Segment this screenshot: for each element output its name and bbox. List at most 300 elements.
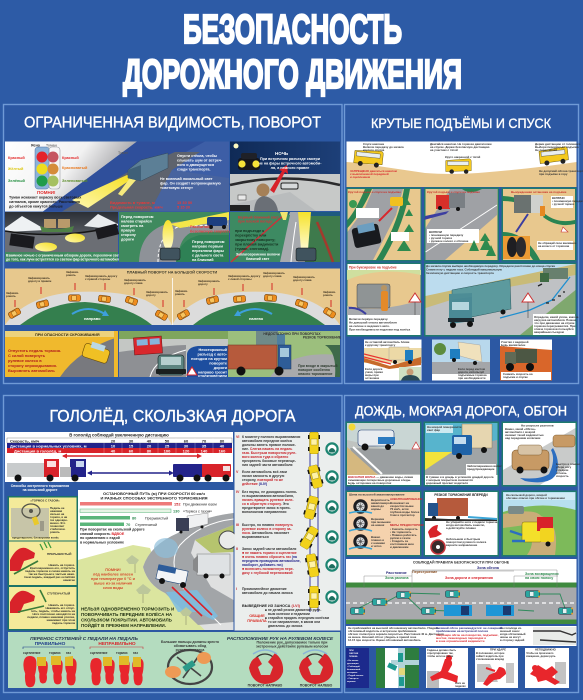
bottom strip: pedals and steering wheel: обхватывать обод bbox=[174, 644, 207, 648]
table: stopping distance with trucks: 80 bbox=[220, 438, 225, 443]
left column: braking methods bbox=[8, 496, 78, 630]
scene: truck in rain with beam: В тумане и в дождь в условиях дождей дорога bbox=[426, 475, 494, 479]
strip: overtaking warnings: мостах, пешеходных переходах и bbox=[436, 636, 486, 640]
note: navy rules box: дистанции bbox=[347, 663, 359, 665]
scene: turn with headlights: с дальнего света bbox=[192, 254, 224, 258]
table: stopping distance with trucks: 30 bbox=[129, 438, 134, 443]
strip: smooth turn at high speed: Зафиксировать bbox=[124, 278, 146, 282]
diagram: overtaking rules: Зона возвращения bbox=[525, 572, 559, 576]
scene: fog and truck: «световую стену» bbox=[160, 186, 193, 190]
right column: skid recovery steps: III bbox=[236, 523, 239, 527]
panel: steep climbs and descent bbox=[344, 104, 583, 384]
right column: skid recovery steps: Без паузы, не дожидаясь полно- bbox=[242, 490, 297, 494]
right column: skid recovery steps: го выравнивания автомобиля, bbox=[242, 494, 294, 498]
scene: night driving bbox=[230, 142, 340, 211]
scene: turn with headlights: безопасную скорость bbox=[190, 230, 232, 234]
scene: careless passing: столкновением bbox=[198, 374, 227, 378]
scene: hill profile with buses: Выбери передачу до подъёма bbox=[535, 145, 579, 149]
small scene: truck on hill: к другому транспорту bbox=[365, 343, 396, 347]
card: posture before impact: педалях bbox=[455, 685, 466, 688]
strip: smooth turn at high speed: с правой стороны bbox=[85, 277, 111, 281]
card: impact figure: НЕПОДВИЖНО bbox=[535, 648, 557, 652]
note: navy rules box: • Не менее bbox=[347, 660, 359, 662]
left column: braking methods: тормоз, и на bbox=[50, 515, 68, 519]
diagram: overtaking rules: Зона разгона bbox=[385, 576, 409, 580]
card: collision posture: ПРИ УДАРЕ bbox=[490, 648, 506, 652]
frame row: meeting on slope bbox=[346, 188, 422, 262]
left column: braking methods: ровать bbox=[50, 530, 60, 534]
scene: fog and truck: фар. Он создаёт непроницаемую bbox=[160, 182, 221, 186]
scene: tanker and truck skid: обочине опасно при обгоне и торможении bbox=[506, 496, 565, 500]
strip: smooth turn at high speed: Зафикси- bbox=[66, 270, 79, 274]
panel: aquaplaning tires: Вершина bbox=[371, 517, 384, 521]
scene: skid danger: С силой повернуть bbox=[8, 353, 46, 358]
small scene: truck on slope: Если перед местом bbox=[458, 367, 485, 371]
left column: braking methods: так же быстрым и частым нажи- bbox=[28, 572, 75, 576]
scene: low beam rule: ближний свет bbox=[246, 257, 270, 261]
strip: smooth turn at high speed: Зафикси- bbox=[6, 291, 19, 295]
center: stopping distance chart and road: НЕЛЬЗЯ ОДНОВРЕМЕННО ТОРМОЗИТЬ И bbox=[81, 606, 174, 612]
right column: skid recovery steps: Если автомобиль всё-таки bbox=[242, 470, 287, 474]
card: impact figure: смещение, держи руль bbox=[526, 655, 556, 658]
scene: low beam rule: Верный ближний свет bbox=[238, 216, 279, 220]
scene: car with water spray: снижает твоей видимостью bbox=[505, 433, 544, 437]
strip: smooth turn at high speed: Зафиксировать bbox=[28, 276, 50, 280]
frame row: stop on descent: • ручной тормоз bbox=[429, 236, 453, 240]
table: stopping distance with trucks: Дистанция в нормальных условиях, м bbox=[10, 443, 87, 448]
scene: car with water spray: На скорости разгонов bbox=[521, 424, 554, 428]
center: stopping distance chart and road: При поворотах на скользкой дороге bbox=[80, 528, 145, 532]
card: collision posture bbox=[475, 648, 518, 688]
panel: truck with sudden brake: а действуйте плавно bbox=[446, 526, 476, 530]
bottom strip: pedals and steering wheel: экстренных действиях рулевым колесом bbox=[256, 644, 328, 648]
panel: aquaplaning tires: нормы bbox=[371, 507, 381, 511]
panel: aquaplaning tires: 3 мм и протектор bbox=[390, 513, 415, 517]
card: posture before impact: Сиденье должно быть bbox=[427, 648, 456, 652]
scene: low beam rule: закрытому повороту; bbox=[235, 238, 275, 242]
strip: overtaking warnings: Запрещён обгон на поворотах, подъёмах, bbox=[436, 633, 499, 637]
left column: braking methods: позволяет bbox=[50, 524, 65, 528]
table: stopping distance with trucks bbox=[5, 432, 233, 482]
bottom strip: pedals and steering wheel: тормоз bbox=[116, 651, 128, 655]
right column: skid recovery steps: Занос задней части автомобиля bbox=[242, 547, 296, 551]
scene: careless passing: дороги bbox=[214, 366, 228, 370]
scene: car with water spray: Быстро и плавно bbox=[556, 462, 580, 466]
main title bbox=[123, 6, 462, 97]
bottom strip: pedals and steering wheel: Положение рук, допускаемое только при bbox=[257, 640, 327, 644]
bottom strip: pedals and steering wheel: сцепление bbox=[90, 651, 108, 655]
small scene: truck on slope bbox=[432, 340, 490, 380]
right column: skid recovery steps: то же направление, в каком они bbox=[268, 620, 320, 624]
strip: overtaking warnings: когда обгоняемый bbox=[500, 632, 526, 636]
strip: overtaking warnings: приближение на встречной полосе bbox=[436, 629, 489, 633]
center: stopping distance chart and road: 130 bbox=[173, 508, 180, 514]
strip: smooth turn at high speed: Зафикси- bbox=[323, 290, 336, 294]
small scene: off-road truck: Участки с ведёрной bbox=[501, 340, 529, 344]
strip: smooth turn at high speed: дорогу слева bbox=[263, 274, 282, 278]
strip: overtaking warnings bbox=[346, 626, 576, 646]
bottom strip: pedals and steering wheel: ПОВОРОТ НАПРАВО bbox=[248, 684, 283, 688]
panel: aquaplaning tires: на шинах bbox=[371, 523, 385, 527]
frame row: stop on descent bbox=[424, 188, 499, 262]
scene: large truck on descent: До начала спуска выбери необходимую передачу. Определи расстояние до конца спуска bbox=[426, 264, 555, 268]
note: navy rules box: зеркала bbox=[347, 681, 356, 683]
scene: car with water spray: с педали bbox=[556, 468, 569, 472]
scene: mountain road at night: Взаимное ночью с ограниченным обзором дороги, переключи свет фар на ближний bbox=[6, 254, 149, 258]
scene: turn with headlights: правую bbox=[121, 228, 135, 232]
diagram: junction bbox=[376, 648, 419, 688]
scene: turn with headlights bbox=[119, 212, 232, 262]
frame row: forced stop: Вынужденная остановка на подъёме bbox=[511, 190, 567, 194]
strip: overtaking warnings: Начинай обгон рекомендуется: не совершай bbox=[436, 626, 503, 630]
center: stopping distance chart and road: 70 bbox=[126, 522, 130, 527]
bottom strip: pedals and steering wheel: рулевого колеса bbox=[176, 648, 204, 652]
label: emergency braking methods: на скользкой дороге bbox=[23, 488, 57, 492]
small scene: truck on slope: подъёмные тормоза bbox=[458, 373, 487, 377]
left column: braking methods: Нажать на тормоз. bbox=[49, 563, 75, 567]
scene: careless passing: поездом на крутом bbox=[191, 357, 227, 361]
small scene: truck on hill: Не оставляй автомобиль ближе bbox=[365, 340, 410, 344]
strip: overtaking warnings: На гололёде из- bbox=[500, 626, 522, 630]
scene: hill profile with buses: и сцеплением bbox=[350, 175, 370, 179]
table: stopping distance with trucks: 40 bbox=[220, 443, 225, 448]
diagram: overtaking rules bbox=[346, 559, 576, 624]
strip: smooth turn at high speed: ровать bbox=[323, 293, 333, 297]
note: navy rules box: ПРИ bbox=[349, 650, 354, 652]
right column: skid recovery steps: действие (II-IV) bbox=[242, 482, 267, 486]
center: stopping distance chart and road: При движении юзом bbox=[183, 502, 217, 506]
left column: braking methods: сильно на bbox=[50, 512, 65, 516]
panel: aquaplaning tires: глубина воды более bbox=[390, 510, 420, 514]
note: navy rules box bbox=[346, 648, 369, 688]
right column: skid recovery steps: сторону, повторяй то же bbox=[242, 478, 283, 482]
scene: turn with headlights: на ближний bbox=[192, 258, 214, 262]
strip: smooth turn at high speed: направо bbox=[84, 316, 101, 321]
scene: hill profile with buses: Круто накренной с тягой bbox=[445, 155, 481, 159]
scene: fog and truck: Туман bbox=[46, 144, 57, 148]
right column: skid recovery steps bbox=[234, 432, 340, 630]
scene: fog and truck: Видимость в тумане, м bbox=[110, 200, 155, 205]
scene: turn with headlights: переключи фары bbox=[192, 249, 224, 253]
card: collision posture: столкновении вперёд bbox=[476, 657, 504, 661]
scene: fog and truck: Туман искажает окраску всех световых bbox=[9, 196, 82, 200]
right column: skid recovery steps: носа. Автомобиль начинает bbox=[242, 531, 289, 535]
table: stopping distance with trucks: 10 bbox=[111, 443, 116, 448]
scene: turn with headlights: налево старайся bbox=[121, 220, 152, 224]
diagram: overtaking rules: на свою полосу bbox=[525, 576, 553, 580]
scene: night driving: НОЧЬ bbox=[275, 151, 289, 156]
scene: fog and truck: Зеленоватый bbox=[62, 179, 88, 183]
table: stopping distance with trucks: 30 bbox=[184, 443, 189, 448]
left column: braking methods: Педаль не bbox=[50, 506, 65, 510]
center: stopping distance chart and road: И РАЗНЫХ СПОСОБАХ ЭКСТРЕННОГО ТОРМОЖЕНИЯ bbox=[101, 496, 208, 500]
scene: large truck on descent: безопасную дистанцию и скорость транспорта bbox=[426, 271, 494, 275]
diagram: overtaking rules: Зона дороги и опережения bbox=[445, 576, 493, 580]
center: stopping distance chart and road: Ступенчатый bbox=[135, 523, 157, 527]
left column: braking methods: Ноги постоянно находятся на bbox=[32, 612, 75, 616]
small scene: truck on hill: Если дорога bbox=[365, 367, 383, 371]
note: navy rules box: ПОМНИ: bbox=[349, 656, 358, 658]
bottom strip: pedals and steering wheel: ПЕРЕНОС СТУПЕНЕЙ С ПЕДАЛИ НА ПЕДАЛЬ bbox=[30, 634, 138, 642]
scene: large truck on descent: тормоза перегреваются. При bbox=[534, 324, 576, 328]
heading: rain: ДОЖДЬ, МОКРАЯ ДОРОГА, ОБГОН bbox=[355, 404, 567, 418]
scene: mountain road at night: до того, как лучи встретятся со светом фар встречного автомобиля bbox=[6, 258, 121, 262]
panel: truck with sudden brake: РЕЗКОЕ ТОРМОЖЕНИЕ ВПЕРЕДИ bbox=[434, 493, 488, 497]
frame row: forced stop: на колесо от тормозов bbox=[538, 244, 570, 248]
left column: braking methods: Нажимать его отпус- bbox=[45, 606, 75, 610]
scene: big truck on curve: НЕДОСТАТОЧНО ПРИ ПОВОРОТАХ bbox=[263, 332, 321, 336]
scene: turn with headlights: Перед поворотом bbox=[192, 240, 225, 244]
card: posture before impact bbox=[426, 648, 468, 688]
panel: aquaplaning tires: АКВАПЛАНИРОВАНИЕ bbox=[390, 497, 423, 501]
right column: skid recovery steps: газа. Быстрым поворотом руле- bbox=[242, 451, 296, 455]
frame row: forced stop: • ручной тормоз bbox=[552, 202, 575, 206]
scene: skid danger: рулевое колесо в bbox=[8, 358, 42, 363]
left column: braking methods: Кратковременно его, отпустить bbox=[30, 566, 75, 570]
scene: truck in rain with beam: свет фар bbox=[427, 428, 440, 432]
frame row: towing on climb: Включи первую передачу. bbox=[349, 317, 388, 321]
table: stopping distance with trucks: 80 bbox=[147, 448, 152, 453]
scene: turn with headlights: смотреть на bbox=[121, 224, 144, 228]
scene: careless passing: направо грозит bbox=[198, 370, 227, 374]
bottom strip: pedals and steering wheel bbox=[8, 632, 340, 688]
heading: limited visibility: ОГРАНИЧЕННАЯ ВИДИМОСТЬ, ПОВОРОТ bbox=[24, 114, 321, 132]
bottom strip: pedals and steering wheel: РАСПОЛОЖЕНИЕ РУК НА РУЛЕВОМ КОЛЕСЕ bbox=[227, 636, 334, 642]
scene: big truck on curve: опасно торможение bbox=[298, 372, 333, 376]
right column: skid recovery steps: Быстро, но плавно повернуть bbox=[242, 523, 293, 527]
scene: car with water spray: и снизь bbox=[556, 471, 567, 475]
table: stopping distance with trucks: 60 bbox=[184, 438, 189, 443]
scene: car with water spray: автомобиля с мокрой bbox=[505, 430, 536, 434]
scene: fog and truck: Не включай локальный свет bbox=[160, 177, 213, 181]
small scene: truck on hill bbox=[364, 340, 422, 380]
note: navy rules box: • Смотри в bbox=[347, 678, 359, 680]
scene: large truck on descent: Сними ногу с педали газа. Соблюдай максимальную bbox=[426, 268, 503, 272]
bottom strip: pedals and steering wheel: ПОВОРОТ НАЛЕВО bbox=[300, 684, 333, 688]
small scene: truck on hill: узкая, прими bbox=[365, 370, 383, 374]
scene: low beam rule: перекрёстку или bbox=[235, 234, 267, 238]
scene: hill profile with buses: Спуск наклона bbox=[363, 142, 384, 146]
scene: skid danger: Отпустить педаль тормоза. bbox=[8, 348, 61, 353]
right column: skid recovery steps: ВЫВЕДЕНИЕ ИЗ ЗАНОСА (I-VI) bbox=[242, 604, 301, 608]
panel: aquaplaning tires: 70 км/ч, если bbox=[390, 507, 409, 511]
scene: hill profile with buses: Держи дистанцию от головного bbox=[535, 142, 581, 146]
strip: smooth turn at high speed: дорогу слева bbox=[124, 281, 143, 285]
left column: braking methods: СТУПЕНЧАТЫЙ bbox=[47, 592, 70, 596]
panel: aquaplaning tires: и давлением bbox=[390, 545, 408, 549]
left column: braking methods: педали, плавно нажимая усилие, bbox=[27, 615, 75, 619]
table: stopping distance with trucks: 160 bbox=[219, 448, 226, 453]
right column: skid recovery steps: начать вращать рулевое коле- bbox=[242, 498, 293, 502]
strip: overtaking warnings: не менее. Начинай обгон: убедись в правой зоне bbox=[348, 635, 417, 639]
right column: skid recovery steps: ния задней части автомобиля bbox=[242, 463, 293, 467]
note: navy rules box: • Подай сигнал bbox=[347, 674, 364, 677]
strip: smooth turn at high speed: Зафикси- bbox=[175, 289, 188, 293]
scene: hill profile with buses: Не переключай bbox=[535, 148, 557, 152]
center: stopping distance chart and road: слоя воды bbox=[103, 586, 123, 590]
frame row: forced stop: Не обращай свое внимание bbox=[538, 241, 577, 245]
bottom strip: pedals and steering wheel: газ bbox=[133, 651, 138, 655]
scene: fog and truck: Жёлтый bbox=[7, 167, 24, 171]
scene: wet road jeep bbox=[346, 422, 422, 486]
right column: skid recovery steps: ■ не делай резких движений руле- bbox=[265, 608, 321, 612]
table: stopping distance with trucks: 70 bbox=[202, 438, 207, 443]
strip: overtaking warnings: обгона: посмотри в зеркала скоростью. Расстояния 40 м. Дистанция bbox=[348, 632, 444, 636]
scene: turn with headlights: Перед поворотом bbox=[121, 215, 154, 219]
panel: aquaplaning tires: Вероятность bbox=[371, 498, 390, 502]
scene: fog and truck: 15 30 50 bbox=[177, 200, 192, 205]
panel: aquaplaning tires: Шина на высокой аквапланирование bbox=[349, 492, 405, 496]
right column: skid recovery steps: автомобиля передние колёса bbox=[242, 439, 292, 443]
scene: fog and truck: Красноватый bbox=[62, 166, 88, 170]
scene: mountain road at night bbox=[5, 212, 149, 262]
card: posture before impact: отрегулировано так, bbox=[427, 652, 454, 655]
table: stopping distance with trucks: 40 bbox=[147, 438, 152, 443]
center: stopping distance chart and road: ОСТАНОВОЧНЫЙ ПУТЬ (м) ПРИ СКОРОСТИ 60 км/ч bbox=[103, 491, 206, 496]
scene: hill profile with buses bbox=[346, 142, 583, 187]
scene: hill profile with buses: ЗАПРЕЩЕНО двигаться накатом bbox=[350, 169, 397, 173]
small scene: off-road truck bbox=[500, 340, 552, 380]
frame row: forced stop bbox=[502, 188, 583, 262]
scene: big truck on curve bbox=[228, 331, 342, 377]
scene: large truck on descent: Определи, какой уклон, какова bbox=[534, 315, 579, 319]
diagram: overtaking rules: Перестроение bbox=[412, 570, 437, 574]
panel: truck with sudden brake: верните направление bbox=[446, 543, 478, 547]
right column: skid recovery steps: ОБЩИЕ bbox=[249, 613, 265, 618]
right column: skid recovery steps: начал заносить в другую bbox=[242, 474, 284, 478]
table: stopping distance with trucks: 50 bbox=[165, 438, 170, 443]
scene: truck in rain with beam: с мокрым покрытием снижается bbox=[426, 478, 473, 482]
left column: braking methods: тить, педаль, чтобы нажать на bbox=[31, 609, 75, 613]
panel: aquaplaning tires: • Следить за bbox=[390, 539, 408, 543]
scene: truck in rain with beam: Заблаговременно включи bbox=[467, 464, 505, 468]
table: stopping distance with trucks: Дистанция в гололёд, м bbox=[14, 448, 61, 453]
scene: car with water spray: Важно, какой «Обгон» bbox=[505, 427, 536, 431]
table: stopping distance with trucks: 20 bbox=[147, 443, 152, 448]
strip: overtaking warnings: шины не могут bbox=[500, 635, 521, 639]
scene: low beam rule: Заблаговременно включи bbox=[236, 252, 280, 256]
panel: truck with sudden brake: Небольшим и быстрым bbox=[446, 537, 480, 541]
panel: ice, slippery road bbox=[4, 396, 342, 692]
strip: overtaking warnings: 12-15 при скорости. Оцени обгоняемый автомобиль bbox=[348, 638, 421, 642]
panel: aquaplaning tires: • Снизить скорость bbox=[390, 527, 418, 531]
table: stopping distance with trucks: 20 bbox=[111, 438, 116, 443]
scene: skid danger: ПРИ ОПАСНОСТИ СКРОЖИВАНИЯ bbox=[35, 333, 100, 337]
center: stopping distance chart and road: по сравнению с ездой bbox=[80, 536, 120, 540]
frame row: towing on climb bbox=[346, 262, 422, 336]
bottom strip: pedals and steering wheel: сцепление bbox=[23, 651, 41, 655]
scene: tanker and truck skid: На скользкой дороге, мокрой bbox=[506, 493, 547, 497]
right column: skid recovery steps: ■ включить пониженную пере- bbox=[242, 567, 294, 571]
right column: skid recovery steps: рулевое колесо в сторону за- bbox=[242, 527, 292, 531]
right column: skid recovery steps: VI bbox=[236, 435, 239, 439]
small scene: truck on hill: остановке bbox=[365, 376, 380, 380]
strip: smooth turn at high speed: ровать bbox=[66, 273, 76, 277]
scene: fog and truck: Ясно bbox=[31, 144, 41, 148]
scene: fog and truck: Туман bbox=[118, 151, 128, 155]
table: stopping distance with trucks: 15 bbox=[129, 443, 134, 448]
main title: БЕЗОПАСНОСТЬ bbox=[183, 6, 402, 52]
panel: aquaplaning tires: состоянием шин bbox=[390, 542, 414, 546]
scene: wet road jeep: ВНЕЗАПНЯ ВОЛНА — движение воды, ливни bbox=[348, 475, 413, 479]
scene: careless passing: повороте bbox=[209, 362, 227, 366]
left column: braking methods: ПРЕРЫВИСТЫЙ bbox=[47, 552, 71, 556]
note: navy rules box: безопасный bbox=[347, 668, 361, 671]
scene: truck in rain with beam: На мокрой поверхности bbox=[427, 425, 462, 429]
left column: braking methods: нажимают при этом bbox=[47, 618, 75, 622]
scene: fog and truck: слышать шум от встреч- bbox=[177, 158, 223, 162]
scene: skid danger bbox=[5, 331, 118, 377]
left column: braking methods: педаль тормоза bbox=[52, 621, 75, 625]
strip: smooth turn at high speed: дорогу bbox=[146, 293, 156, 297]
panel: limited visibility, turn bbox=[4, 104, 342, 384]
card: posture before impact: Ноги на bbox=[455, 681, 465, 685]
scene: big truck on curve: При входе в закрытый bbox=[298, 364, 338, 368]
scene: skid danger: сторону опрокидывания. bbox=[8, 363, 57, 368]
right column: skid recovery steps: предотвратит занос в проти- bbox=[242, 506, 291, 510]
diagram: overtaking rules: СОБЛЮДАЙ ПРАВИЛА БЕЗОПАСНОСТИ ПРИ ОБГОНЕ bbox=[413, 560, 510, 564]
table: stopping distance with trucks: 25 bbox=[165, 443, 170, 448]
scene: fog and truck: ного и движущегося bbox=[177, 163, 214, 167]
frame row: forced stop: ВКЛЮЧИ bbox=[552, 196, 565, 200]
scene: hill profile with buses: на спуске. Держи безопасную дистанцию bbox=[430, 145, 490, 149]
bottom strip: pedals and steering wheel: ПРАВИЛЬНО bbox=[35, 641, 66, 647]
scene: fog and truck bbox=[5, 142, 229, 212]
right column: skid recovery steps: со в обратную сторону. Это bbox=[242, 502, 289, 506]
strip: smooth turn at high speed: Зафиксировать bbox=[263, 271, 285, 275]
strip: smooth turn at high speed: ровать bbox=[6, 294, 16, 298]
center: stopping distance chart and road: «Тормоз с газом» bbox=[183, 510, 212, 514]
center: stopping distance chart and road bbox=[78, 490, 237, 630]
scene: hill profile with buses: на участках с тягой bbox=[430, 148, 458, 152]
frame row: stop on descent: ВКЛЮЧИ bbox=[429, 230, 442, 234]
panel: truck with sudden brake bbox=[424, 490, 499, 556]
panel: aquaplaning tires: скоростях выше bbox=[390, 504, 414, 508]
scene: night driving: ля, а немного правее bbox=[271, 166, 309, 170]
strip: smooth turn at high speed: Зафиксировать дорогу bbox=[228, 274, 261, 278]
center: stopping distance chart and road: в нормальных условиях bbox=[80, 540, 124, 544]
scene: fog and truck: Красный bbox=[62, 156, 79, 160]
right column: skid recovery steps: ■ не нажать тормоз и сцепление bbox=[242, 551, 297, 555]
panel: aquaplaning tires: и чётко bbox=[371, 544, 382, 548]
heading: ice: ГОЛОЛЁД, СКОЛЬЗКАЯ ДОРОГА bbox=[50, 406, 296, 426]
frame row: towing on climb: При необходимости подложи под колёса bbox=[349, 328, 410, 332]
scene: car with water spray: убери ногу bbox=[556, 465, 572, 469]
strip: overtaking warnings: менный занос bbox=[500, 629, 520, 633]
scene: big truck on curve: РЕЗКОЕ ТОРМОЖЕНИЕ bbox=[303, 336, 342, 340]
frame row: towing on climb: на склоне и ведомого авто. bbox=[349, 324, 390, 328]
scene: hill profile with buses: Двигайся накатом. Не тормози двигателем bbox=[430, 142, 492, 146]
scene: large truck on descent: аварийным съездом bbox=[534, 330, 564, 334]
scene: car with water spray: скорость bbox=[556, 474, 569, 478]
heading: steep climbs: КРУТЫЕ ПОДЪЁМЫ И СПУСК bbox=[371, 116, 551, 131]
scene: careless passing bbox=[119, 331, 229, 378]
scene: large truck on descent: нагрузка автомобиля. Помни, bbox=[534, 318, 577, 322]
scene: fog and truck: 5 15 30 bbox=[177, 204, 190, 210]
scene: truck in rain with beam: предупреждающие bbox=[467, 467, 495, 471]
left column: braking methods: нажатие bbox=[63, 578, 75, 582]
scene: fog and truck: Красный bbox=[8, 156, 25, 160]
scene: skid danger: Выровнять автомобиль bbox=[8, 368, 55, 373]
scene: hill profile with buses: с выключенной передачей bbox=[350, 172, 389, 176]
table: stopping distance with trucks: 140 bbox=[201, 448, 208, 453]
right column: skid recovery steps: переднем приводном автомобиле, bbox=[242, 559, 301, 563]
scene: low beam rule: при плохой видимости bbox=[235, 242, 279, 246]
panel: aquaplaning tires: рулём и газом bbox=[390, 536, 410, 540]
panel: truck with sudden brake: Не убирайте ноги с педали тормоза, bbox=[446, 520, 498, 524]
scene: turn with headlights: Рассчитай bbox=[190, 225, 210, 229]
scene: turn with headlights: направо первым bbox=[192, 244, 223, 248]
